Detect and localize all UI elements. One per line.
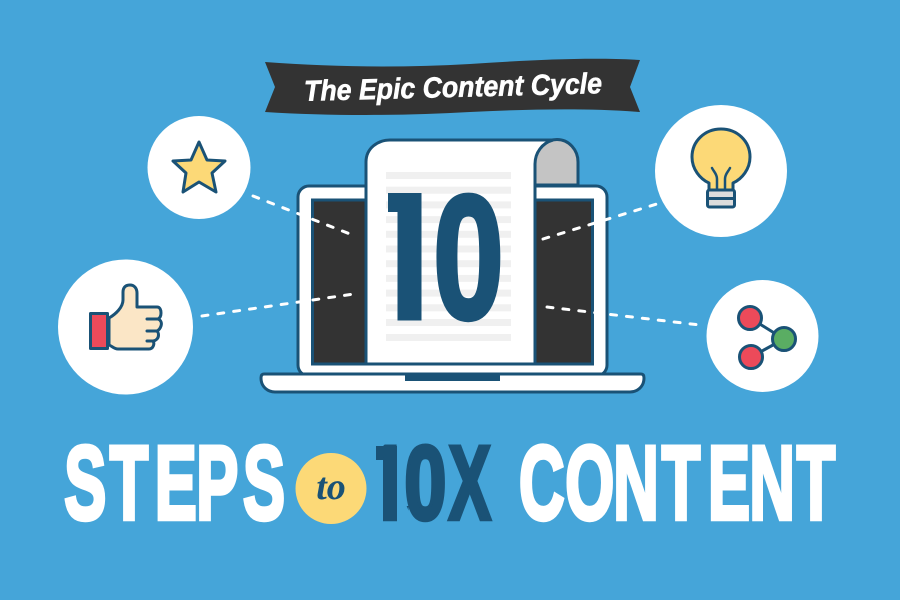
document page with curled corner xyxy=(366,140,578,364)
headline: 10X: 10 xyxy=(367,425,446,542)
banner: The Epic Content Cycle xyxy=(265,59,640,115)
icon: share nodes xyxy=(706,280,818,392)
headline: CONTENT: CONTENT xyxy=(519,426,835,542)
badge: to xyxy=(296,453,366,524)
laptop xyxy=(261,186,644,392)
headline: 10X xyxy=(376,444,493,522)
big number 10 xyxy=(388,192,500,322)
badge: to: to xyxy=(316,466,346,508)
dashed connectors xyxy=(202,196,700,325)
headline: STEPS: STEPS xyxy=(64,426,285,542)
text lines on page xyxy=(386,172,511,341)
banner: The Epic Content Cycle: The Epic Content Cycle xyxy=(304,68,602,108)
infographic canvas xyxy=(58,58,836,524)
icon: thumbs up xyxy=(58,260,193,394)
icon: light bulb xyxy=(655,105,787,237)
headline: 10X: X xyxy=(449,426,491,542)
icon: star xyxy=(148,116,250,219)
big number 10: 10 xyxy=(367,160,504,356)
